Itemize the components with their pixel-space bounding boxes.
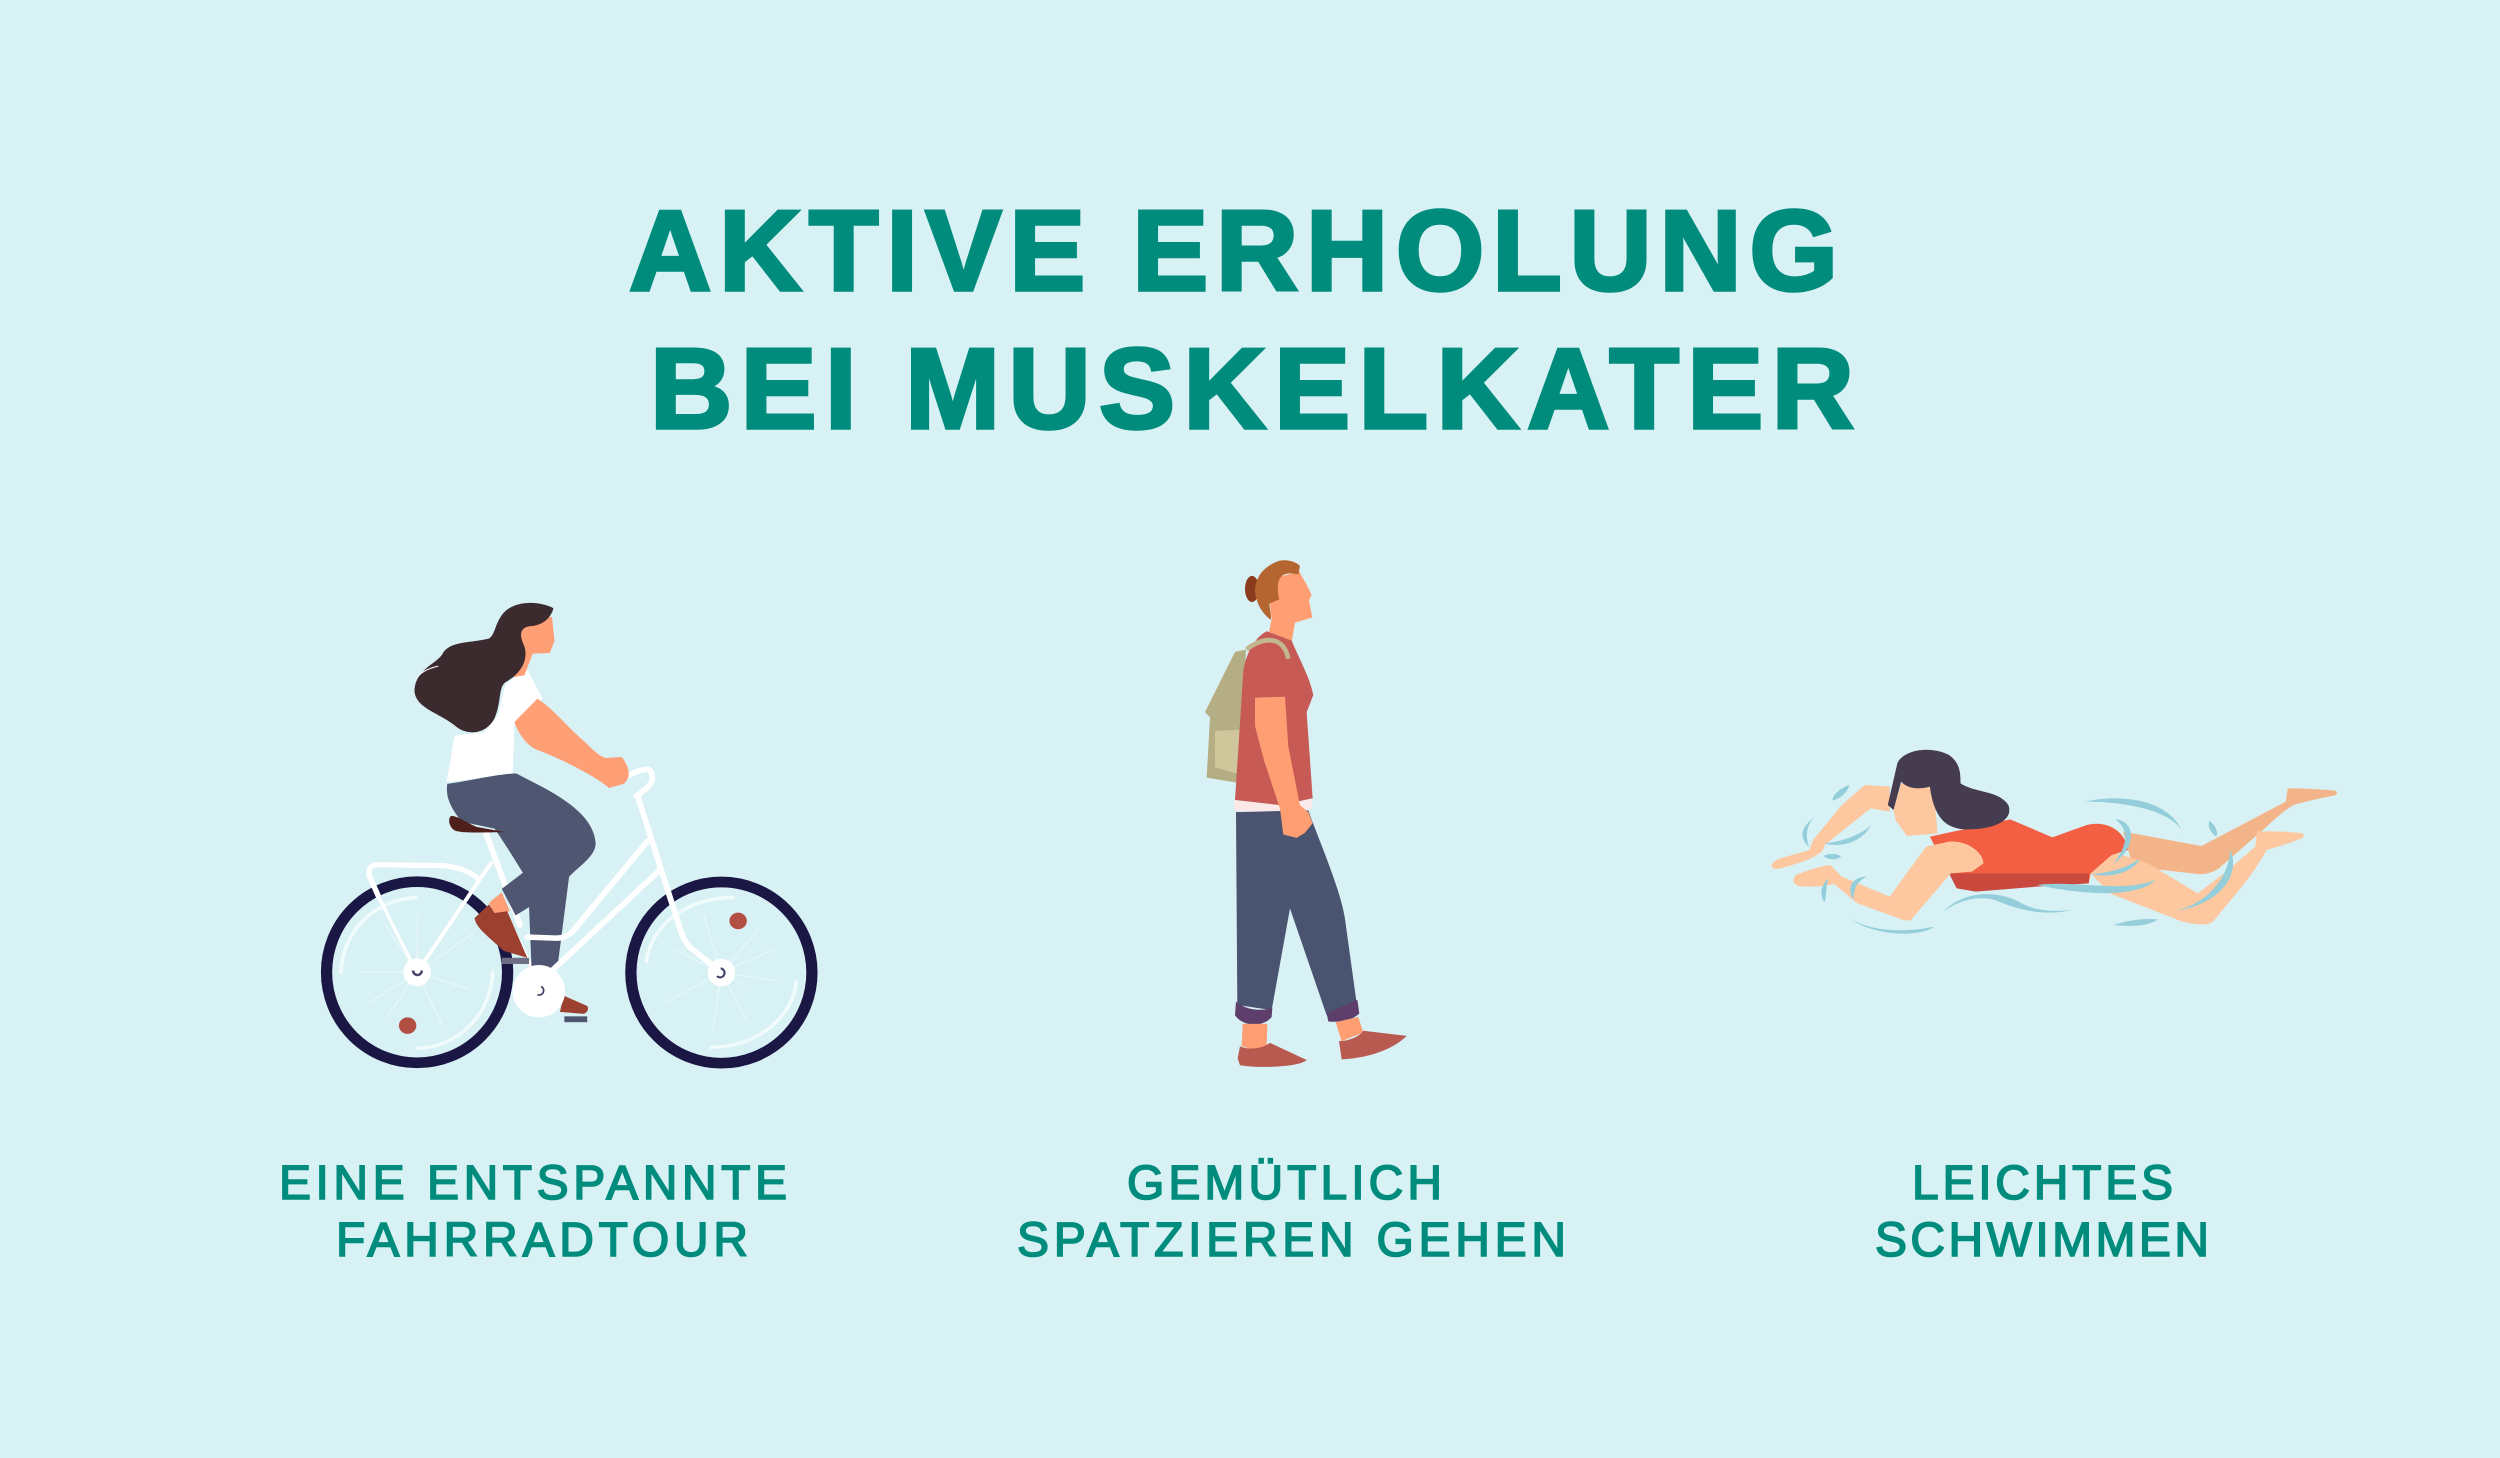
icon: wheel highlights [341, 898, 796, 1048]
icon: trousers [447, 774, 596, 970]
icon: trousers [1236, 810, 1357, 1015]
icon: ankle [489, 892, 510, 915]
icon: arm [515, 699, 629, 788]
label: cycling [279, 1157, 787, 1267]
illustration: woman cycling [327, 603, 812, 1063]
icon: arm [1255, 697, 1313, 838]
icon: near shoe [475, 904, 527, 958]
illustration: woman swimming [1772, 750, 2337, 934]
icon: shirt [447, 670, 543, 782]
title: BEI MUSKELKATER [650, 326, 1854, 453]
icon: bicycle wheels [327, 882, 812, 1063]
icon: red t-shirt [1235, 631, 1313, 805]
illustration: walking person with backpack [1205, 560, 1407, 1067]
icon: near arm [1793, 842, 1983, 921]
icon: backpack strap [1247, 640, 1288, 659]
icon: ankles [1242, 1017, 1363, 1050]
icon: face [1894, 783, 1938, 836]
icon: saddle [449, 816, 505, 833]
label: swimming [1875, 1157, 2209, 1267]
icon: hair [1888, 750, 2009, 829]
label: walking: SPATZIEREN GEHEN [1017, 1214, 1566, 1267]
icon: rear frame and rack [369, 832, 535, 973]
label: cycling: EINE ENTSPANNTE [279, 1157, 787, 1210]
icon: pedals [502, 958, 587, 1022]
icon: wheel reflectors [399, 913, 747, 1034]
icon: hubs and chainring [403, 958, 735, 1017]
icon: water splashes [1802, 785, 2233, 934]
icon: shoes [1238, 1031, 1407, 1067]
icon: far leg [2123, 788, 2337, 874]
icon: trouser cuffs [1235, 1000, 1359, 1025]
icon: far arm [1772, 785, 1890, 869]
label: walking: GEMÜTLICH [1127, 1157, 1442, 1210]
icon: face [513, 617, 555, 677]
title [629, 188, 1854, 453]
icon: front frame [527, 769, 721, 977]
icon: white undershirt [1234, 799, 1313, 816]
icon: near leg [2091, 831, 2304, 924]
title: AKTIVE ERHOLUNG [629, 188, 1838, 315]
label: walking [1017, 1157, 1566, 1267]
icon: hair [1245, 560, 1300, 620]
icon: backpack [1205, 650, 1257, 783]
icon: far foot [560, 996, 588, 1014]
icon: long hair [415, 603, 553, 732]
icon: spokes [360, 915, 780, 1032]
icon: swimsuit [1930, 819, 2128, 887]
label: cycling: FAHRRADTOUR [336, 1214, 748, 1267]
icon: skin, neck and face [1268, 572, 1312, 642]
label: swimming: SCHWIMMEN [1875, 1214, 2209, 1267]
label: swimming: LEICHTES [1912, 1157, 2173, 1210]
